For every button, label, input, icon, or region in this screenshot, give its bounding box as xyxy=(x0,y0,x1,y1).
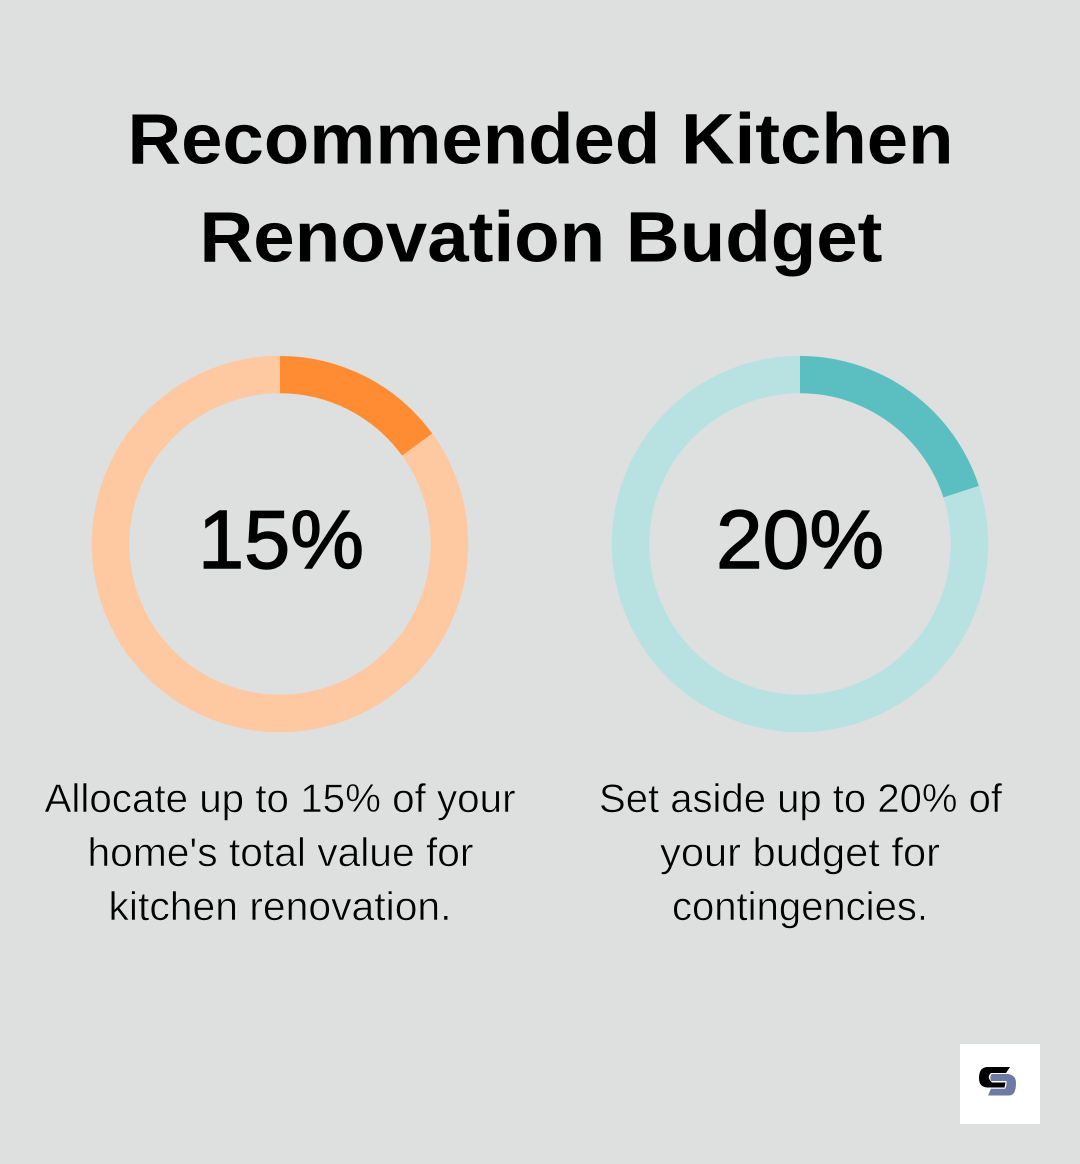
title: Recommended Kitchen xyxy=(128,100,953,180)
title xyxy=(128,100,953,278)
donut chart: 15% xyxy=(110,356,450,714)
text block: 15% description xyxy=(44,777,516,929)
text block: 20% description xyxy=(599,777,1003,929)
text block: 20% description: contingencies. xyxy=(672,885,928,929)
text block: 15% description: Allocate up to 15% of your xyxy=(44,777,516,821)
value: 20%: 20% xyxy=(716,493,884,586)
text block: 15% description: home's total value for xyxy=(88,831,474,875)
text block: 20% description: Set aside up to 20% of xyxy=(599,777,1003,821)
text block: 15% description: kitchen renovation. xyxy=(108,885,452,929)
logo badge xyxy=(960,1044,1040,1124)
title: Renovation Budget xyxy=(200,198,882,278)
text block: 20% description: your budget for xyxy=(660,831,940,875)
donut chart: 20% xyxy=(630,356,979,714)
value: 15%: 15% xyxy=(198,493,364,586)
